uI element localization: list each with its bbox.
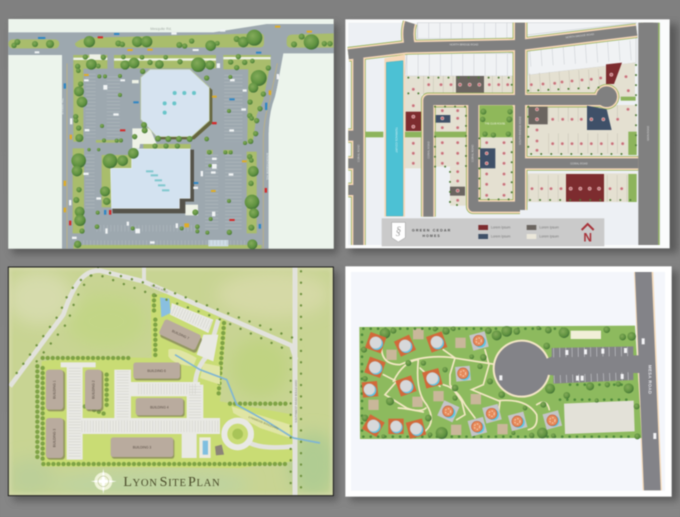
panel: Green Cedar Homes subdivision plan: [345, 19, 670, 248]
legend labels: Lorem Ipsum: [491, 235, 511, 239]
clubhouse: [215, 445, 224, 455]
building labels: BUILDING 3: [53, 429, 57, 447]
road network peach edge: [348, 23, 648, 245]
road label: MESA ROAD: [647, 365, 652, 394]
lot dividers lower rows: [423, 78, 628, 188]
legend panel: [382, 218, 604, 246]
lane markings: [67, 63, 277, 249]
logo shield: [392, 222, 405, 242]
highlighted lots: maroon: [406, 63, 622, 202]
road names: CORAL ROAD: [356, 145, 360, 162]
ground base: [8, 267, 333, 496]
watercolor tone patches: [7, 271, 337, 498]
dark frame: [8, 267, 333, 496]
brand name: GREEN CEDAR: [412, 228, 451, 232]
small shrubs along edges: [362, 329, 637, 437]
road label west: Brewer Rd.: [60, 98, 64, 114]
road network green edge: [348, 23, 648, 245]
cream pad: [571, 331, 601, 339]
cul-de-sac edge: [493, 340, 551, 398]
residential buildings type B: [437, 331, 562, 436]
creek label: LYNNWOOD BOULEVARD: [248, 415, 280, 431]
base ground: [8, 19, 334, 249]
logo shield: §: [395, 225, 401, 237]
building 1 shadow: [143, 72, 212, 139]
parking cars: [499, 338, 656, 439]
road names: MAIN ROAD: [646, 126, 650, 141]
park: [479, 105, 513, 138]
parking lots: [61, 303, 220, 460]
stall markings: [75, 310, 218, 458]
Mesa Road: [635, 272, 661, 490]
trees: [361, 326, 640, 439]
block lots: [405, 63, 637, 206]
brand sub-name: HOMES: [422, 234, 441, 238]
trees: [11, 30, 333, 249]
road names: [356, 32, 650, 166]
legend swatch: navy: [478, 234, 488, 239]
road and parking surface: [8, 24, 334, 249]
highway label: SOUTHWEST RIVER BOULEVARD: [294, 380, 298, 423]
white frame: [345, 266, 672, 497]
frame vignette: [8, 267, 333, 496]
white block west: [8, 55, 62, 249]
ground: [348, 23, 661, 245]
road names: CORAL ROAD: [470, 145, 474, 162]
gravel lot: [564, 401, 635, 434]
building 2 shadow: [111, 150, 194, 213]
street trees along lot edges: [408, 65, 636, 205]
lot markers: [412, 73, 630, 202]
pale ground: [351, 272, 665, 491]
building 1 roof: [141, 69, 209, 137]
tan plots: [368, 329, 508, 435]
park: THE CLUB HOUSE: [485, 123, 506, 125]
north arrow: N: [583, 230, 592, 244]
road label: Mesquite Rd.: [150, 27, 172, 31]
parking stalls: [553, 351, 633, 379]
road network asphalt: [348, 23, 648, 245]
highlighted lots: navy: [436, 106, 612, 168]
roads: [10, 267, 296, 496]
legend labels: Lorem Ipsum: [539, 235, 559, 239]
road names: NORTH BRIDGE ROAD: [450, 43, 478, 47]
road verge: [634, 272, 662, 490]
footpaths: [382, 348, 549, 431]
building labels: BUILDING 4: [150, 405, 169, 409]
white frame: [345, 19, 670, 248]
tree masses: [37, 295, 290, 464]
building labels: BUILDING 3: [133, 445, 151, 449]
road names: NORTH BRIDGE ROAD: [565, 32, 594, 39]
landscaped medians and strips: [8, 33, 334, 249]
north arrow: [582, 224, 594, 244]
compass rose: [91, 469, 117, 494]
legend swatch: cream: [527, 234, 536, 239]
legend labels: Lorem Ipsum: [491, 226, 511, 230]
plan title: LYONSITEPLAN: [123, 475, 220, 490]
creek banks: [168, 349, 290, 438]
road names: SOUTH BRIDGE ROAD: [518, 116, 522, 145]
legend labels: Lorem Ipsum: [539, 226, 559, 230]
building labels: BUILDING 2: [92, 380, 96, 399]
residential buildings type A: [362, 331, 447, 439]
building labels: BUILDING 1: [53, 380, 57, 399]
upper white lots: [405, 23, 637, 76]
roundabout: [224, 421, 251, 447]
legend swatch: grey: [527, 225, 536, 230]
east highway widening: [638, 23, 658, 245]
road-side trees: [17, 265, 301, 491]
canal edge: [384, 54, 405, 217]
cars: [35, 26, 312, 244]
lot dividers upper rows: [407, 31, 636, 65]
green site: [359, 326, 642, 439]
creek: [175, 355, 320, 443]
road label east: Brookmeadow Rd.: [266, 153, 270, 180]
cul-de-sac and parking pavement: [495, 342, 642, 396]
legend swatch: maroon: [478, 225, 488, 230]
building 1 skylights: [163, 91, 196, 115]
buildings: [46, 319, 203, 460]
watercolor ground and contents: [7, 265, 337, 498]
white block east: [269, 53, 334, 249]
pond: [160, 297, 171, 317]
building labels: [53, 329, 190, 449]
canal water: [386, 61, 403, 216]
pool: [199, 437, 211, 458]
road names: CORAL ROAD: [570, 162, 588, 166]
parking stall rows: [83, 74, 247, 243]
green strips: [365, 97, 637, 202]
building labels: BUILDING 6: [147, 369, 166, 373]
canal label: TERRACE COURT: [394, 127, 398, 153]
building 2 skylights: [146, 170, 169, 191]
building 2 roof: [111, 149, 190, 208]
road names: CORAL ROAD: [426, 141, 430, 159]
east highway verge: [658, 23, 660, 245]
pale walkways: [73, 54, 271, 246]
building labels: BUILDING 7: [171, 329, 190, 341]
legend labels: [491, 226, 559, 239]
road label: VENICE ROAD: [150, 283, 169, 294]
panel: Mesa Road campus plan: [345, 266, 672, 497]
panel: shopping centre site plan: [8, 19, 334, 249]
panel: Lyon site plan: [7, 265, 337, 498]
highlighted lots: dark grey: [450, 76, 548, 196]
site landscaping: [42, 293, 293, 468]
